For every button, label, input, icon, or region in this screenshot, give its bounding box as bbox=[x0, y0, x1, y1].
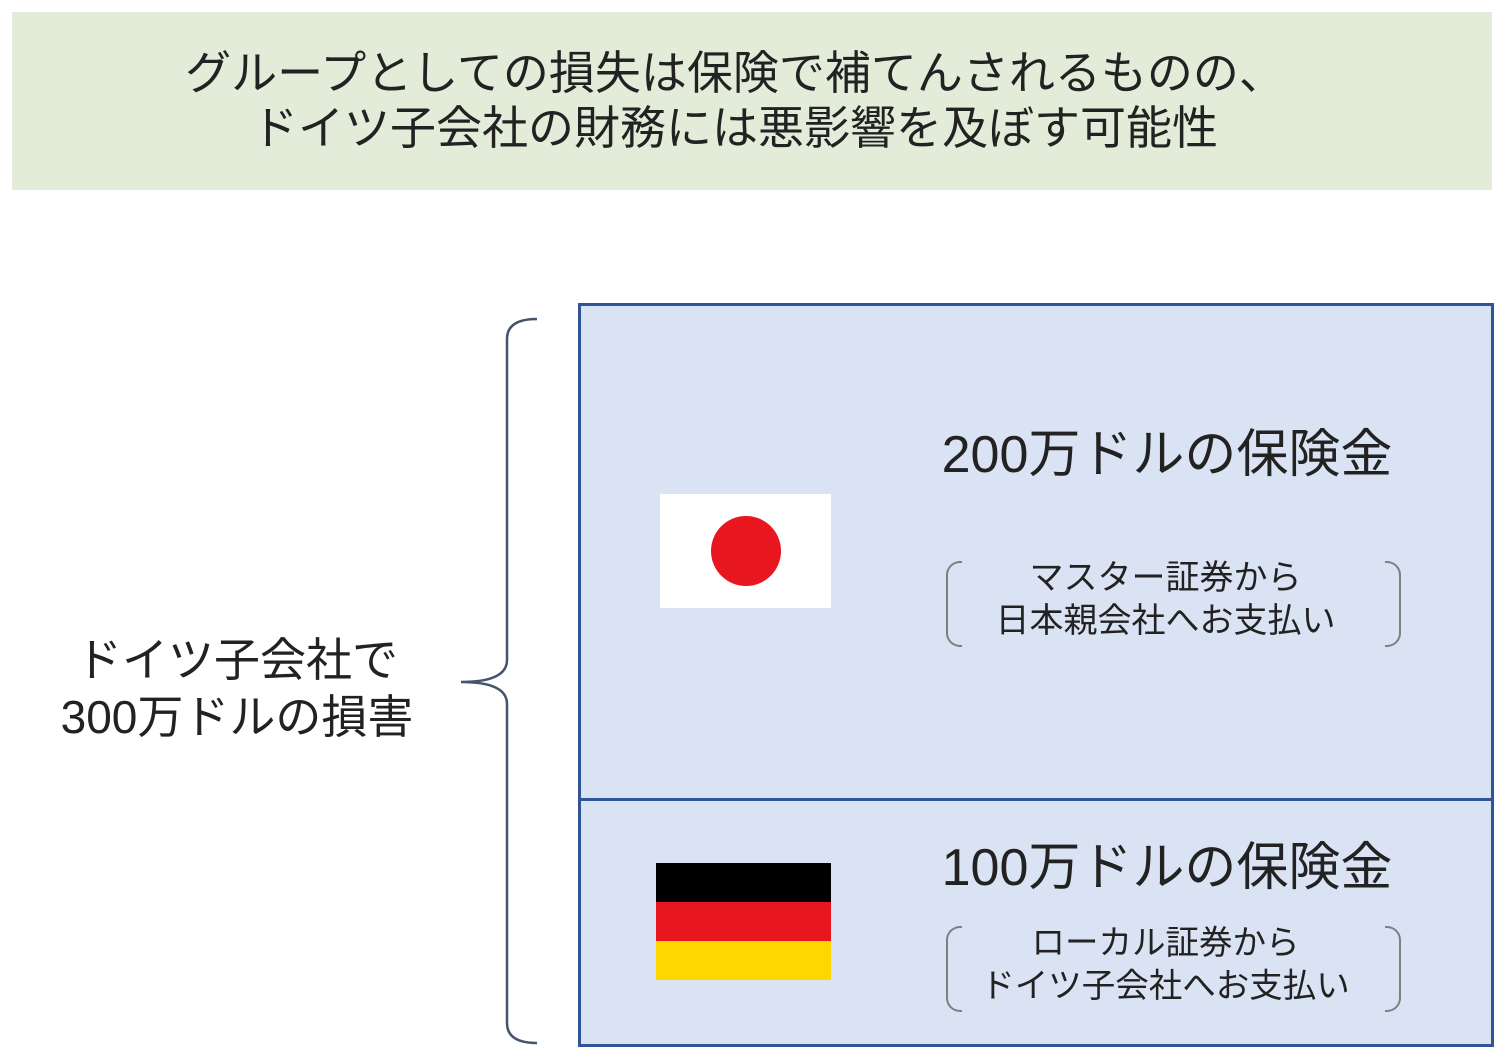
divider bbox=[581, 798, 1491, 801]
title text: グループとしての損失は保険で補てんされるものの、 bbox=[185, 47, 1285, 99]
note: master policy: 日本親会社へお支払い bbox=[996, 602, 1336, 640]
left label: loss: ドイツ子会社で bbox=[76, 634, 398, 686]
note: master policy: マスター証券から bbox=[1030, 559, 1302, 597]
heading: 100万: 100万ドルの保険金 bbox=[942, 839, 1392, 897]
title text: ドイツ子会社の財務には悪影響を及ぼす可能性 bbox=[252, 102, 1218, 154]
panel: insurance boxes bbox=[578, 303, 1494, 1047]
icon: Germany flag bbox=[656, 863, 831, 980]
title banner bbox=[12, 12, 1492, 190]
note: local policy bbox=[946, 925, 1401, 1012]
left label: loss bbox=[61, 634, 413, 743]
note: local policy: ドイツ子会社へお支払い bbox=[981, 968, 1350, 1005]
brace bbox=[461, 318, 537, 1044]
left label: loss: 300万ドルの損害 bbox=[61, 691, 413, 743]
heading: 200万: 200万ドルの保険金 bbox=[942, 426, 1392, 484]
note: local policy: ローカル証券から bbox=[1032, 925, 1300, 962]
note: master policy bbox=[946, 559, 1401, 647]
title text bbox=[185, 47, 1285, 154]
icon: Japan flag bbox=[660, 494, 831, 608]
